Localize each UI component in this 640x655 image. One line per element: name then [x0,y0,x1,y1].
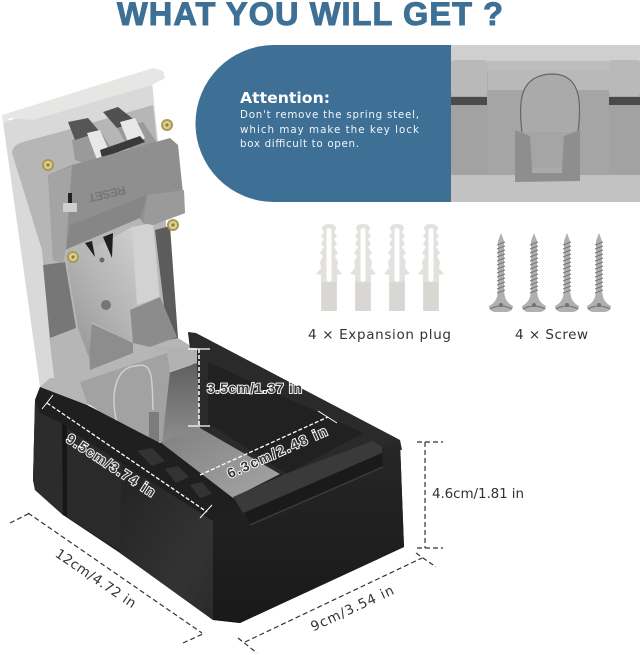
label: expansion plug: 4 × Expansion plug [308,327,451,343]
attention heading: Attention: [240,89,330,107]
lower block [88,322,133,370]
lid flange [2,68,165,125]
dimension: interior length [42,395,212,518]
front face [213,442,404,623]
left face [33,400,63,515]
back rim [188,332,402,476]
dimension text: 9cm: 9cm/3.54 in [308,583,397,635]
dimension text: 6.3cm: 6.3cm/2.48 in [224,423,330,481]
attention body text [240,109,419,150]
metal plate [67,223,160,358]
hinge block [152,347,197,372]
clip holder [149,412,159,442]
wire clip [114,365,153,423]
dimension text: 3.5cm: 3.5cm/1.37 in [207,380,302,396]
latches [68,107,157,165]
plastic expansion plugs [316,224,444,311]
lock box lid, open [2,68,197,395]
compartment floor [160,428,280,498]
dimension text: 12cm: 12cm/4.72 in [52,546,139,612]
left rim [35,387,242,520]
lock box base [33,332,404,623]
lid body [3,82,197,395]
attention body text: Don't remove the spring steel, [240,109,419,121]
attention body text: box difficult to open. [240,138,359,150]
dimension: outer length [10,513,205,643]
reset module [48,138,185,263]
dimension: interior height [188,349,210,426]
attention body text: which may make the key lock [240,124,419,136]
lid hinge strip [40,378,90,405]
dimension text: 9.5cm: 9.5cm/3.74 in [63,430,159,500]
screws [489,233,611,312]
dimension text: 4.6cm: 4.6cm/1.81 in [432,486,524,502]
dimension: outer width [238,553,436,653]
brass screws [42,119,179,263]
front groove [245,453,383,524]
dimension: outer height [417,442,443,548]
reset switch [63,193,77,212]
dark grey wall [162,363,200,443]
front rim bar [233,441,382,513]
attention background [196,45,451,202]
clip plate [80,353,170,443]
buttons [137,448,212,498]
lid inner panel [12,105,197,390]
base backing silhouette [33,332,404,623]
inner back wall [208,362,363,474]
photo: spring steel close-up [451,45,640,202]
reset label: RESET [86,183,127,205]
dimension: interior width [200,411,337,475]
panel: attention [196,45,451,202]
label: screw: 4 × Screw [515,327,588,343]
